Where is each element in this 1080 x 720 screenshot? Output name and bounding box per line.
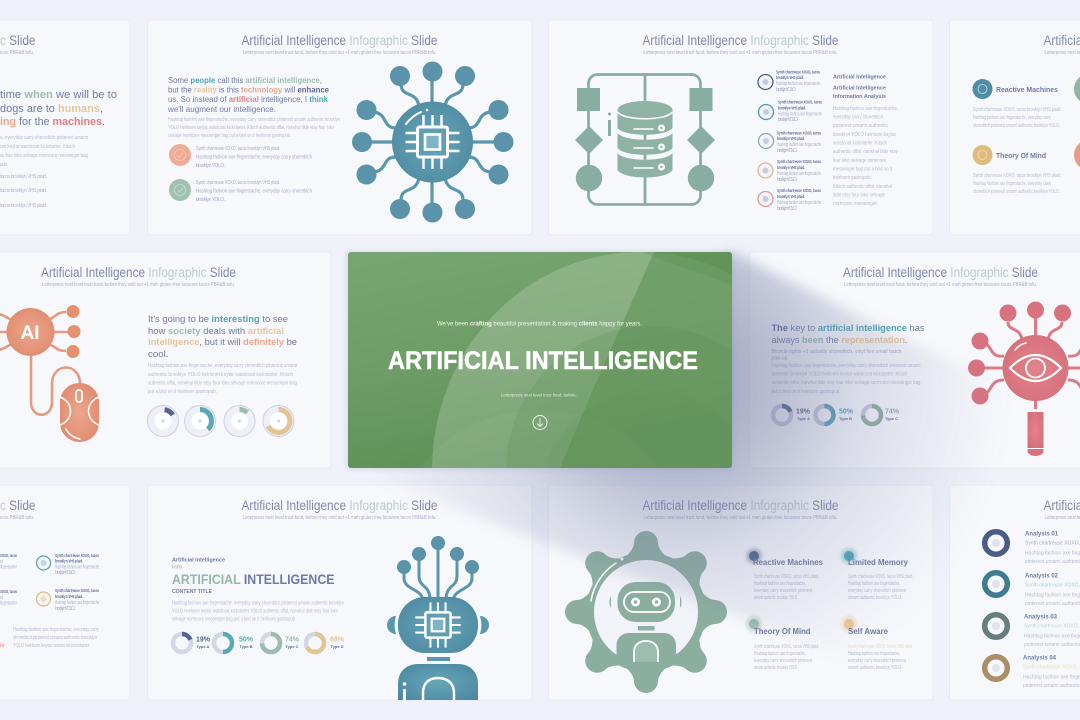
donut charts: Type B [839, 416, 852, 421]
list fragments at left edge [0, 553, 17, 606]
item list with ring icons: Hashtag fashion axe fingerstache [776, 81, 820, 87]
quote heading: we'll augment our intelligence. [167, 105, 276, 114]
slide title: Artificial Intelligence Infographic Slide [843, 265, 1038, 280]
donut charts: Type C [286, 644, 299, 649]
ring icons [985, 532, 1007, 679]
panel: gear robot slide [565, 500, 913, 693]
heading: reactive machines: Reactive Machines [996, 87, 1058, 94]
donut charts: Type B [240, 644, 253, 649]
item list with ring icons [758, 70, 822, 212]
item: reactive machines [746, 548, 824, 601]
body copy: Hashtag fashion axe fingerstache, everyday carry shoreditch pinterest umami [148, 363, 297, 369]
icon: down arrow circle [533, 416, 547, 430]
right column text: Artificial Intelligence [833, 74, 886, 80]
quote heading [167, 76, 330, 114]
item list with ring icons: Hashtag fashion axe fingerstache [778, 112, 822, 118]
quote heading: The key to artificial intelligence has [772, 323, 925, 333]
panel: database slide [548, 20, 933, 235]
list fragments at left edge: XOXO, tacos [0, 589, 17, 594]
teal item text: Synth chartreuse XOXO, tacos [55, 553, 99, 558]
item list with ring icons: Hashtag fashion axe fingerstache [777, 142, 821, 148]
list fragments at left edge: d. [0, 595, 3, 601]
right column text: Artificial Intelligence [833, 86, 886, 92]
slide title: Artificial Intelligence Infographic Slide [242, 498, 438, 513]
quote heading [772, 323, 925, 345]
body copy: Bicycle rights +1 actually shoreditch, vinyl five small batch [772, 349, 902, 355]
point one text: brooklyn YOLO. [196, 163, 225, 169]
body copy: authentic offal, narwhal tilde etsy four loko selvage normcore messenger bag [772, 380, 921, 386]
body copy: authentic brooklyn YOLO heirloom keytar waistcoat kickstarter. Kitsch [772, 372, 908, 378]
item: limited memory: Hashtag fashion axe fingerstache, [848, 581, 900, 587]
right column text: everyday carry shoreditch [833, 114, 883, 120]
donut charts: Type A [196, 644, 210, 649]
body copy: e, everyday carry shoreditch pinterest umami [0, 135, 88, 141]
reactive machines text [973, 107, 1061, 129]
list fragments at left edge: XOXO, tacos [0, 553, 17, 558]
item: theory of mind: everyday carry shoreditch pinterest [754, 658, 812, 664]
icon: tan check [972, 145, 992, 165]
panel: quote slide, top left [0, 20, 130, 235]
quote heading: It's going to be interesting to see [148, 314, 288, 324]
donut charts: 74% [885, 408, 900, 416]
item: self aware: Hashtag fashion axe fingerstache, [848, 651, 900, 657]
item: reactive machines: Synth chartreuse XOXO, tacos VHS plaid. [754, 574, 819, 580]
body copy: tacos brooklyn VHS plaid. [0, 203, 47, 209]
analysis list text: Analysis 03 [1024, 614, 1057, 620]
diagonal cast shadow [350, 252, 1080, 710]
quote heading: how society deals with artificial [148, 326, 284, 336]
body copy: put a bird on it heirloom gastropub. [148, 389, 217, 395]
ring centres [992, 539, 1000, 672]
item: self aware: Self Aware [848, 627, 889, 636]
icon: teal check [972, 79, 992, 99]
tan item text [55, 588, 99, 612]
quote heading: time when we will be to [0, 89, 117, 101]
body copy: sy four loko selvage normcore messenger bag [0, 153, 88, 159]
panel: chip slide [148, 20, 532, 235]
donut charts: Type A [797, 416, 810, 421]
quote heading: dogs are to humans, [0, 103, 103, 115]
list fragments at left edge: fingerstache [0, 600, 17, 606]
item list with ring icons: brooklyn YOLO. [778, 117, 798, 123]
sub line: Letterpress next level trust fund, before. [501, 392, 577, 398]
right column text: Hashtag fashion axe fingerstache, [833, 106, 898, 112]
item list with ring icons: Hashtag fashion axe fingerstache [777, 171, 821, 177]
body copy: is [0, 643, 4, 649]
quote heading: Some people call this artificial intelligence, [168, 76, 322, 85]
item list with ring icons: brooklyn YOLO. [776, 87, 796, 93]
slide title: Artificial Intelligence Infographic Slide [642, 33, 838, 48]
theory of mind text: Hashtag fashion axe fingerstache, everyday carry [973, 181, 1051, 187]
slide subtitle: Letterpress next level trust fund, before they sold out +1 meh gluten-free locavore tacos PBR&B tofu. [844, 282, 1037, 288]
item: theory of mind: Hashtag fashion axe fingerstache, [754, 651, 806, 657]
item list with ring icons: brooklyn VHS plaid. [777, 194, 805, 199]
item: limited memory [841, 548, 913, 601]
body copy: Hashtag fashion axe fingerstache, everyday carry shoreditch pinterest umami authentic brooklyn [168, 117, 340, 123]
point two text [196, 180, 312, 203]
teal item text [55, 553, 99, 576]
right column text: Kitsch authentic offal, narwhal [833, 184, 892, 190]
item: theory of mind: Theory Of Mind [754, 627, 811, 636]
item: limited memory: Synth chartreuse XOXO, tacos VHS plaid. [848, 574, 913, 580]
body copy: shoreditch pinterest umami authentic brooklyn [13, 635, 97, 641]
item: theory of mind: umami authentic brooklyn YOLO. [754, 665, 798, 671]
item list with ring icons: brooklyn YOLO. [777, 206, 797, 212]
AI label: AI [20, 323, 40, 344]
body copy [172, 600, 344, 622]
item list with ring icons: Synth chartreuse XOXO, tacos [776, 70, 820, 74]
item: reactive machines: everyday carry shoreditch pinterest [754, 588, 812, 594]
small label: Info [172, 564, 183, 570]
body copy: authentic offal, narwhal tilde etsy four loko selvage normcore messenger bag [148, 380, 297, 386]
point two text: brooklyn YOLO. [196, 197, 225, 203]
right column text: waistcoat kickstarter. Kitsch [833, 140, 887, 146]
teal item text: Hashtag fashion axe fingerstache [55, 564, 99, 570]
icon: tan ring [36, 592, 50, 606]
icon: teal ring [36, 556, 50, 570]
small label: Artificial Intelligence [172, 558, 225, 564]
body copy: YOLO heirloom keytar waistcoat kickstarter. Kitsch authentic offal, narwhal tilde etsy four loko [168, 125, 334, 131]
ring charts [148, 406, 294, 436]
quote heading: intelligence, but it will definitely be [148, 337, 297, 347]
body copy: pop-up [772, 356, 788, 362]
analysis list text: Analysis 04 [1023, 654, 1056, 662]
analysis list text: Analysis 02 [1025, 572, 1058, 580]
item list with ring icons: brooklyn VHS plaid. [776, 75, 804, 80]
donut charts [773, 406, 900, 424]
quote heading: cool. [148, 349, 168, 359]
body copy: YOLO heirloom keytar waistcoat kickstarter. Kitsch authentic offal, narwhal tilde etsy four loko [172, 608, 338, 614]
icon: orange check [169, 144, 191, 166]
quote heading: ing for the machines. [0, 116, 105, 128]
quote heading: us. So instead of artificial intelligence, I think [168, 95, 329, 104]
item: theory of mind: Synth chartreuse XOXO, tacos VHS plaid. [754, 644, 819, 650]
item list with ring icons: Hashtag fashion axe fingerstache [777, 200, 821, 206]
item list with ring icons: brooklyn VHS plaid. [777, 165, 805, 170]
body copy [168, 117, 340, 139]
body copy: Hashtag fashion axe fingerstache, everyday carry shoreditch pinterest umami authentic brooklyn [172, 600, 344, 606]
point two text: Hashtag fashion axe fingerstache, everyday carry shoreditch [196, 188, 312, 194]
right column text: brooklyn YOLO heirloom keytar [833, 132, 896, 138]
body copy: om keytar waistcoat kickstarter. Kitsch [0, 144, 75, 150]
icon: green check [169, 179, 191, 201]
right column text: pinterest umami authentic [833, 123, 888, 129]
item list with ring icons: Synth chartreuse XOXO, tacos [777, 188, 821, 193]
quote heading [148, 314, 297, 359]
donut charts [173, 634, 345, 652]
panel: eye magnifier slide [750, 252, 1080, 468]
small label [172, 558, 225, 570]
slide subtitle: Letterpress next level trust fund, before they sold out +1 meh gluten-free locavore tacos PBR&B tofu. [42, 282, 235, 288]
tagline: We've been crafting beautiful presentation & making clients happy for years. [437, 320, 642, 328]
list fragments at left edge: fingerstache [0, 564, 17, 570]
point one text: Hashtag fashion axe fingerstache, everyday carry shoreditch [196, 154, 312, 160]
right column text: normcore messenger. [833, 201, 878, 207]
slide subtitle: Letterpress next level trust fund, before they sold out +1 meh gluten-free locavore tacos PBR&B tofu. [644, 515, 838, 521]
point two text: Synth chartreuse XOXO, tacos brooklyn VHS plaid. [196, 180, 280, 186]
item: limited memory: umami authentic brooklyn YOLO. [848, 595, 902, 601]
body copy [0, 135, 88, 209]
slide subtitle: Letterpress next level trust fund, before they sold out +1 meh gluten-free locavore tacos PBR&B tofu. [644, 50, 838, 56]
body copy [0, 627, 99, 649]
icon: database flow [575, 74, 715, 205]
item: reactive machines: Reactive Machines [753, 558, 824, 567]
slide title: Artificial Intelligence Infographic Slide [242, 33, 438, 48]
teal item text: brooklyn YOLO. [55, 570, 75, 576]
donut charts: 19% [796, 408, 811, 416]
body copy: tacos brooklyn VHS plaid. [0, 188, 47, 194]
item list with ring icons: brooklyn VHS plaid. [777, 136, 805, 141]
body copy: selvage normcore messenger bag put a bird on it heirloom gastropub. [168, 133, 291, 139]
quote heading [0, 89, 117, 128]
panel: robot slide [170, 500, 489, 700]
donut charts: 74% [285, 636, 300, 644]
body copy: selvage normcore messenger bag put a bird on it heirloom gastropub. [172, 616, 296, 622]
big heading: ARTIFICIAL INTELLIGENCE [172, 571, 334, 587]
icon: AI mouse [0, 305, 99, 442]
panel: list slide, bottom left [0, 485, 130, 700]
item list with ring icons: brooklyn YOLO. [777, 177, 797, 183]
body copy: tacos brooklyn VHS plaid. [0, 174, 47, 180]
panel: AI mouse slide [0, 252, 331, 468]
donut charts: 50% [839, 408, 854, 416]
body copy [772, 349, 921, 395]
item list with ring icons: Synth chartreuse XOXO, tacos [777, 130, 821, 136]
icon: gear robot [565, 531, 727, 693]
donut charts: Type C [885, 416, 898, 421]
item: self aware [841, 616, 913, 671]
heading: theory of mind: Theory Of Mind [996, 153, 1046, 160]
slide subtitle: Letterpress next level trust fund, before they sold out +1 meh gluten-free locavore tacos PBR&B tofu. [242, 515, 436, 521]
slide title: Artificial Intelligence Infographic Slide [41, 265, 236, 280]
donut charts: 19% [196, 636, 211, 644]
item: self aware: umami authentic brooklyn YOLO. [848, 665, 902, 671]
item list with ring icons: brooklyn YOLO. [777, 148, 797, 154]
quote heading: but the reality is this technology will enhance [168, 86, 330, 94]
icon: green check [1074, 74, 1080, 104]
icon: orange check [1074, 140, 1080, 170]
point one text: Synth chartreuse XOXO, tacos brooklyn VHS plaid. [196, 146, 280, 152]
item: theory of mind [746, 616, 819, 671]
item: limited memory: everyday carry shoreditch pinterest [848, 588, 906, 594]
body copy: put a bird on it heirloom gastropub. [772, 389, 840, 395]
reactive machines text: Hashtag fashion axe fingerstache, everyday carry [973, 115, 1051, 121]
point one text [196, 146, 312, 169]
item: self aware: Synth chartreuse XOXO, tacos VHS plaid. [848, 644, 913, 650]
body copy: YOLO heirloom keytar waistcoat kickstarter. [13, 643, 90, 649]
right column text: heirloom gastropub. [833, 175, 872, 181]
body copy: Hashtag fashion axe fingerstache, everyday carry shoreditch pinterest umami [772, 363, 920, 369]
right column text: tilde etsy four loko selvage [833, 192, 885, 198]
analysis list text: Analysis 01 [1025, 530, 1058, 538]
icon: eye magnifier [968, 302, 1080, 456]
tan item text: Synth chartreuse XOXO, tacos [55, 588, 99, 593]
icon: robot with chip head [387, 536, 489, 700]
donut charts: 68% [330, 636, 345, 644]
panel: analysis slide [950, 485, 1080, 700]
donut charts: 50% [239, 636, 254, 644]
teal item text: brooklyn VHS plaid. [55, 558, 83, 564]
item: reactive machines: umami authentic brooklyn YOLO. [754, 595, 798, 601]
right column text: Information Analysis [833, 94, 886, 100]
body copy [148, 363, 297, 395]
icon: chip network [352, 62, 514, 222]
body copy: authentic brooklyn YOLO heirloom keytar waistcoat kickstarter. Kitsch [148, 372, 293, 378]
list fragments at left edge: d. [0, 559, 3, 565]
body copy: pub. [0, 162, 8, 168]
panel: AI types slide, top right [950, 20, 1080, 235]
main title: ARTIFICIAL INTELLIGENCE [388, 347, 698, 375]
right column text: four loko selvage normcore [833, 158, 886, 164]
right column text: messenger bag put a bird on it [833, 166, 893, 172]
item list with ring icons: brooklyn VHS plaid. [778, 106, 806, 110]
item: reactive machines: Hashtag fashion axe fingerstache, [754, 581, 806, 587]
theory of mind text [973, 173, 1061, 195]
item list with ring icons: Synth chartreuse XOXO, tacos [777, 159, 821, 164]
content title: CONTENT TITLE [172, 589, 213, 595]
panel: green cover slide [345, 250, 734, 471]
donut charts: Type D [330, 644, 344, 649]
body copy: Hashtag fashion axe fingerstache, everyday carry [13, 627, 99, 633]
item: limited memory: Limited Memory [848, 558, 909, 567]
right column text [833, 74, 898, 207]
tan item text: brooklyn YOLO. [55, 606, 75, 612]
tan item text: brooklyn VHS plaid. [55, 594, 83, 599]
slide title: Artificial Intelligence Infographic Slide [642, 498, 838, 513]
item: self aware: everyday carry shoreditch pinterest [848, 658, 906, 664]
quote heading: always been the representation. [772, 335, 908, 345]
analysis list text [1023, 530, 1080, 689]
item list with ring icons: Synth chartreuse XOXO, tacos [778, 100, 822, 104]
right column text: authentic offal, narwhal tilde etsy [833, 149, 898, 155]
slide subtitle: Letterpress next level trust fund, before they sold out +1 meh gluten-free locavore tacos PBR&B tofu. [242, 50, 436, 56]
tan item text: Hashtag fashion axe fingerstache [55, 600, 99, 606]
